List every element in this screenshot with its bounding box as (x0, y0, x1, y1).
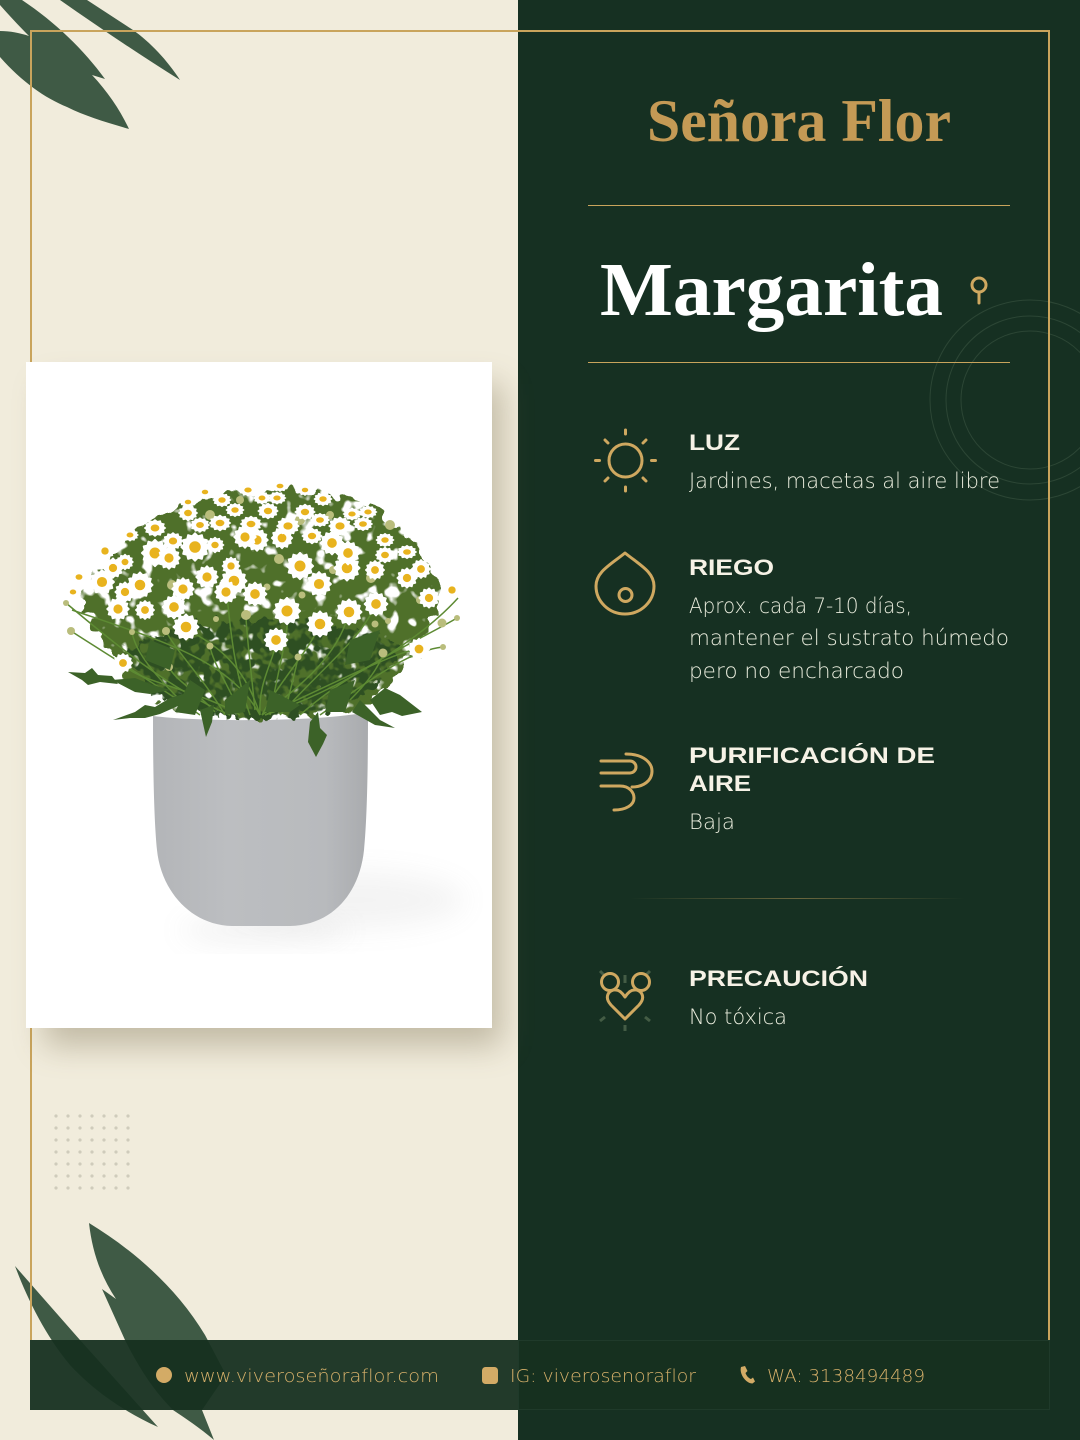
divider below name (588, 362, 1010, 363)
decorative leaves: top left (0, 0, 180, 129)
section: luz: LUZ (689, 430, 740, 455)
section: luz: Jardines, macetas al aire libre (689, 469, 1000, 494)
pot contact shadow (180, 922, 350, 938)
stems (66, 592, 458, 715)
plant name: Margarita (600, 248, 943, 332)
section: precaucion (689, 966, 868, 1030)
divider middle (630, 898, 965, 899)
darker lower foliage (125, 619, 400, 720)
icon: pin (972, 278, 986, 303)
icon: water drop (596, 553, 654, 614)
instagram handle: IG: viverosenoraflor (510, 1367, 697, 1387)
background: dark green right panel (518, 0, 1080, 1440)
section: riego: pero no encharcado (689, 659, 904, 684)
section: purificacion de aire (689, 743, 935, 835)
background: cream left panel (0, 0, 518, 1440)
section: purificacion de aire: AIRE (689, 771, 751, 796)
section: riego (689, 555, 1009, 684)
ceramic pot (153, 712, 368, 926)
section: purificacion de aire: Baja (689, 810, 735, 835)
dot grid decoration (54, 1114, 130, 1190)
photo white card (26, 362, 492, 1028)
icon: web dot (156, 1367, 172, 1383)
section: precaucion: No tóxica (689, 1005, 787, 1030)
decorative leaves: bottom left (15, 1223, 226, 1440)
photo shadow (44, 384, 502, 1046)
website: www.viveroseñoraflor.com (184, 1367, 439, 1387)
jagged leaves (68, 630, 422, 757)
icon: wind (601, 754, 652, 810)
panel: photo of potted margarita (26, 362, 502, 1046)
section: riego: RIEGO (689, 555, 774, 580)
icon: phone (741, 1366, 755, 1384)
icon: instagram square (482, 1367, 498, 1384)
concentric circles decoration (930, 300, 1080, 500)
divider top (588, 205, 1010, 206)
section: luz (689, 430, 1000, 494)
brand title: Señora Flor (647, 88, 951, 154)
section: precaucion: PRECAUCIÓN (689, 966, 868, 991)
icon: heart with rays (600, 971, 650, 1031)
section: riego: mantener el sustrato húmedo (689, 626, 1009, 651)
pot ground shadow (235, 872, 465, 928)
section: purificacion de aire: PURIFICACIÓN DE (689, 743, 935, 768)
buds (63, 496, 460, 671)
icon: sun (596, 430, 656, 491)
daisy flowers (65, 480, 461, 672)
upper foliage mass (82, 490, 442, 716)
footer bar (30, 1340, 1050, 1410)
phone number: WA: 3138494489 (767, 1367, 925, 1387)
section: riego: Aprox. cada 7-10 días, (689, 594, 912, 619)
